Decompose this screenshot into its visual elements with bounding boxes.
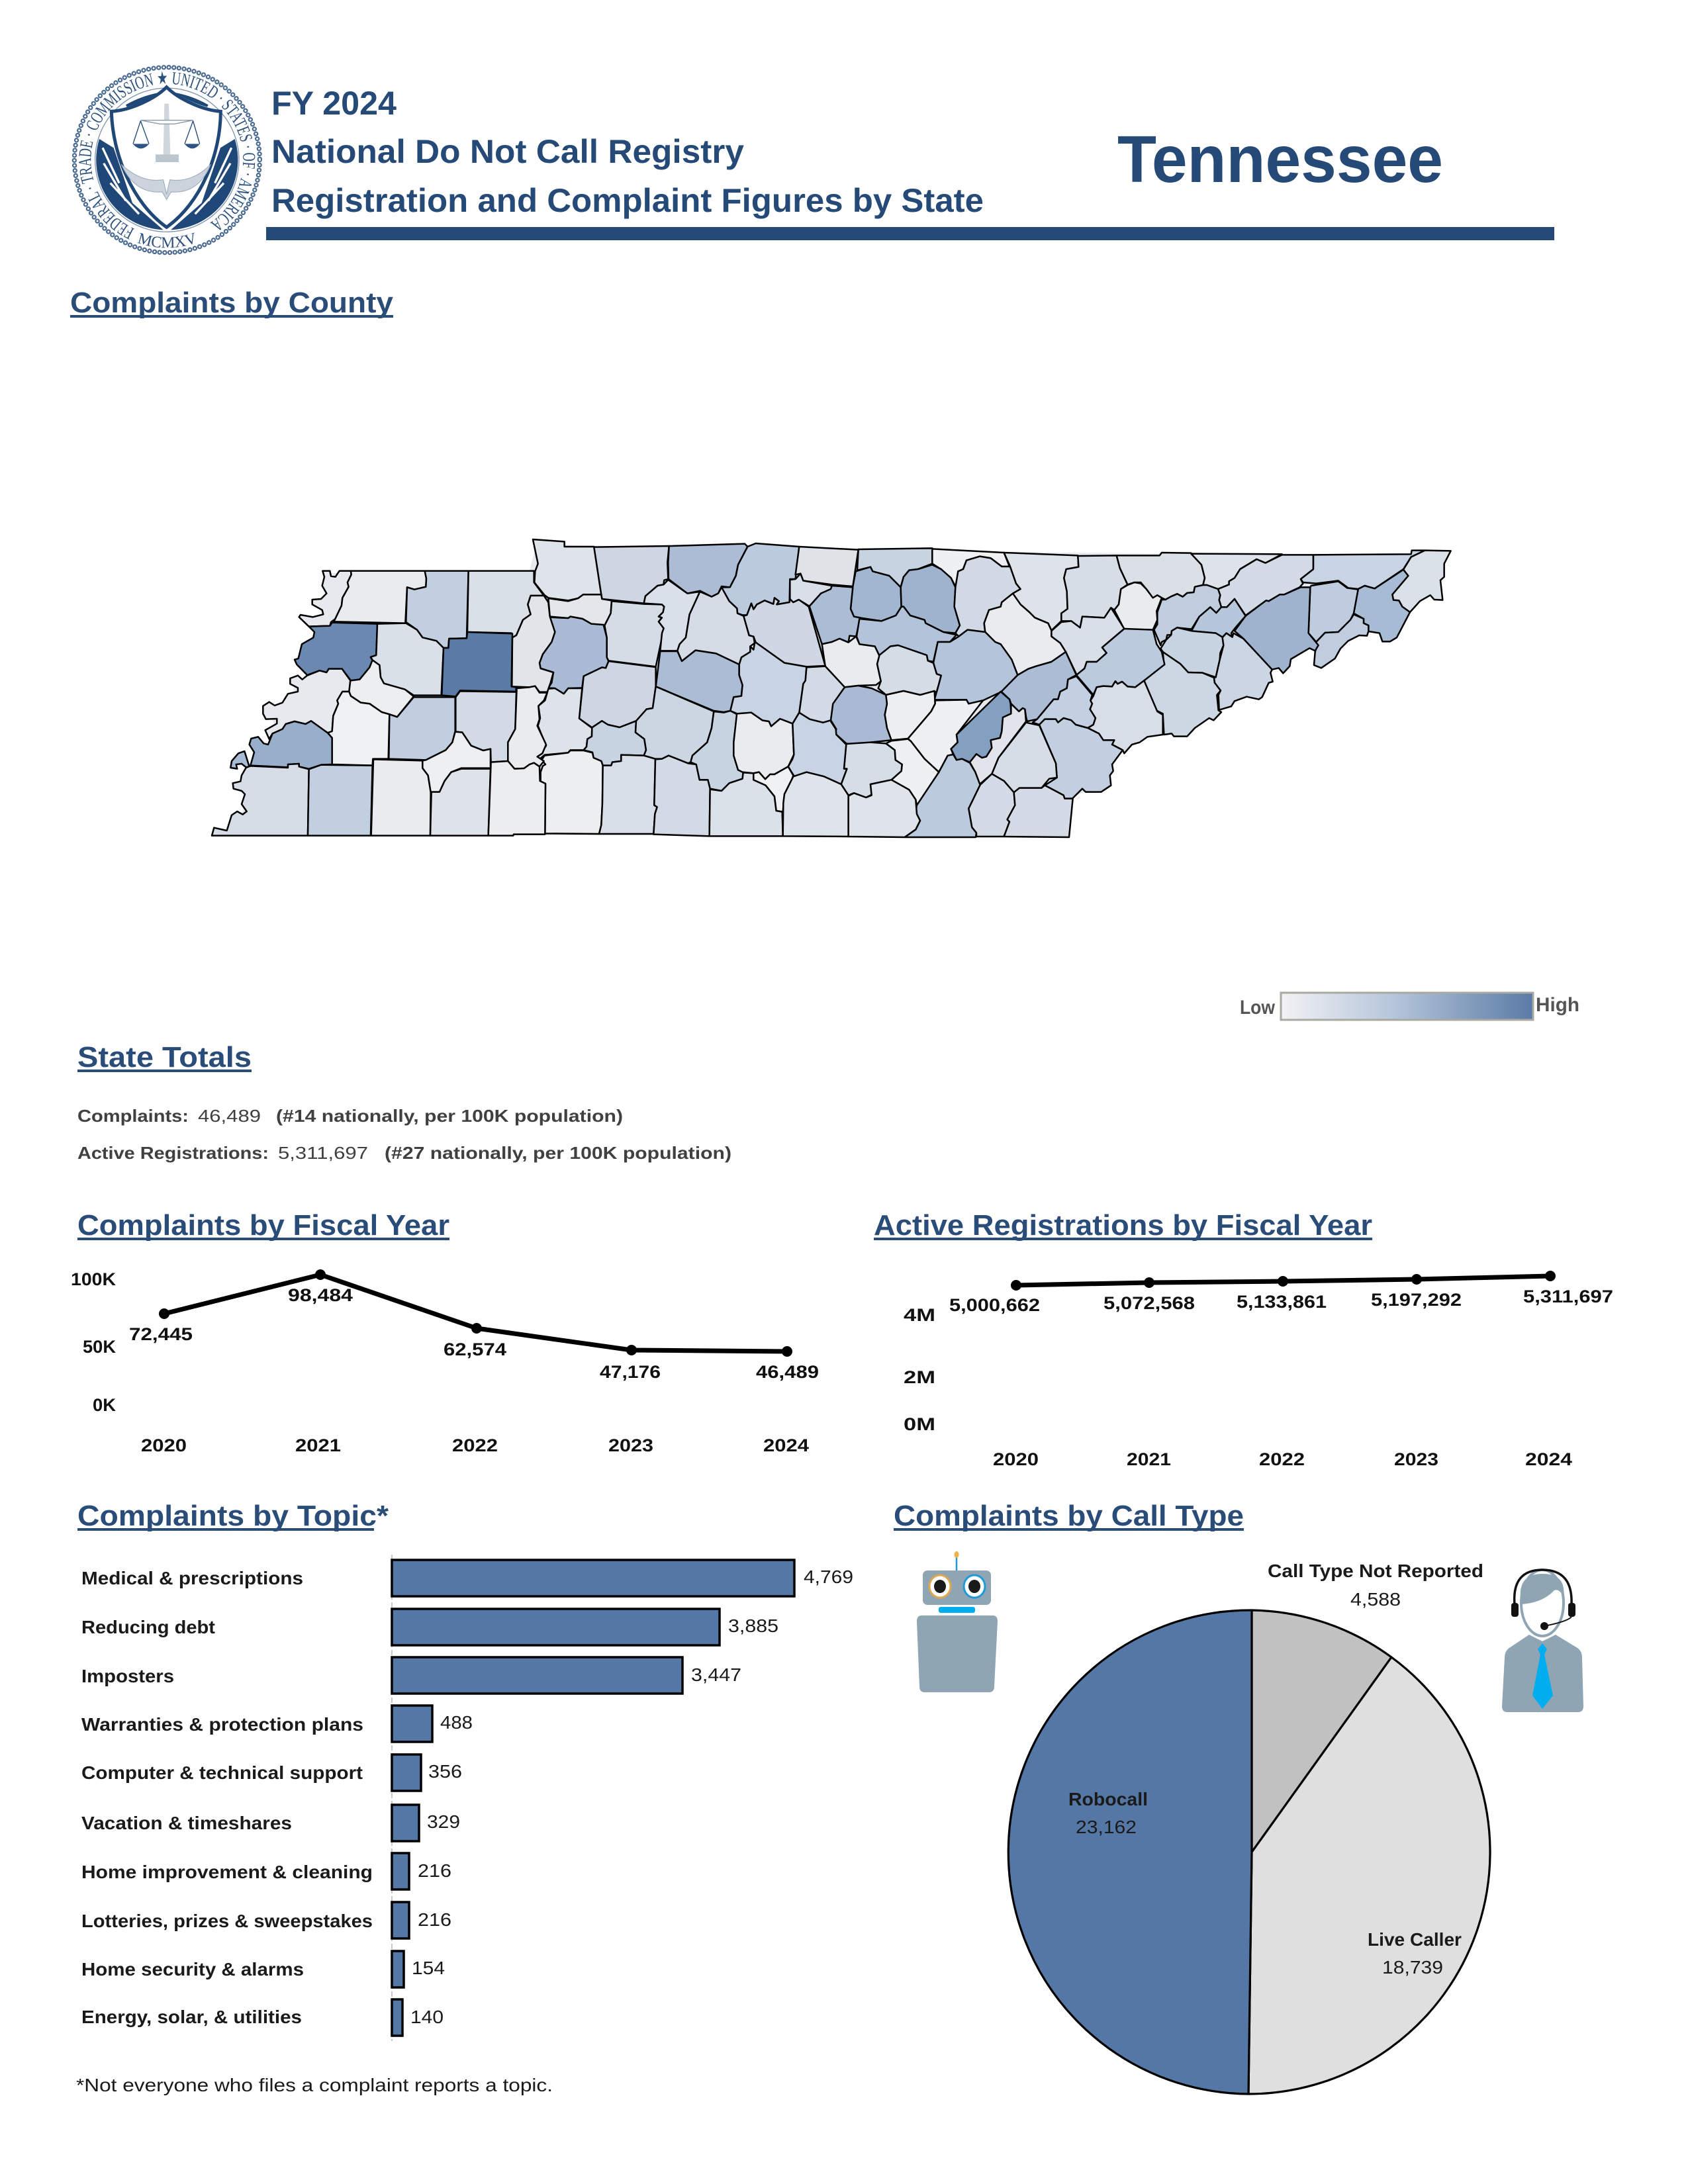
text block: state totals: (#27 nationally, per 100K population) xyxy=(385,1143,731,1163)
line chart: complaints by fiscal year xyxy=(71,1269,819,1455)
bar chart: complaints by topic: Computer & technical support xyxy=(81,1762,363,1783)
line chart: active registrations by fiscal year: 2021 xyxy=(1127,1449,1171,1469)
bar chart: complaints by topic: Reducing debt xyxy=(81,1617,215,1637)
text block: state totals: Active Registrations: xyxy=(77,1143,269,1163)
line chart: complaints by fiscal year: 62,574 xyxy=(444,1340,506,1359)
heading: state totals: State Totals xyxy=(77,1041,252,1073)
line chart: active registrations by fiscal year: 2020 xyxy=(993,1449,1039,1469)
title: report heading xyxy=(271,85,984,219)
bar chart: complaints by topic: 140 xyxy=(410,2007,444,2027)
line chart: active registrations by fiscal year: 4M xyxy=(904,1305,935,1325)
line chart: complaints by fiscal year: 2024 xyxy=(763,1435,809,1455)
title: state name: Tennessee xyxy=(1117,122,1443,197)
header rule xyxy=(266,227,1554,240)
pie labels: Live Caller xyxy=(1368,1929,1462,1950)
bar chart: complaints by topic: 216 xyxy=(418,1909,451,1930)
line chart: complaints by fiscal year: 50K xyxy=(83,1337,117,1357)
bar chart: complaints by topic: 3,447 xyxy=(691,1664,741,1685)
bar chart: complaints by topic: 154 xyxy=(412,1958,445,1978)
bar chart: complaints by topic: 329 xyxy=(427,1811,460,1832)
line chart: complaints by fiscal year: 2022 xyxy=(452,1435,498,1455)
line chart: active registrations by fiscal year: 5,311,697 xyxy=(1523,1287,1613,1306)
legend: low to high scale: Low xyxy=(1240,997,1276,1019)
icon: robot xyxy=(917,1551,998,1692)
pie chart: complaints by call type xyxy=(1008,1610,1490,2094)
logo: FTC seal: FEDERAL · TRADE · COMMISSION ★ UNITED · STATES · OF · AMERICA xyxy=(79,71,256,240)
legend: low to high scale: High xyxy=(1536,994,1579,1016)
heading: complaints by county: Complaints by County xyxy=(70,287,394,319)
line chart: complaints by fiscal year: 98,484 xyxy=(288,1285,353,1305)
legend: low to high scale xyxy=(1240,993,1579,1020)
heading: complaints by call type: Complaints by Call Type xyxy=(894,1500,1244,1532)
line chart: active registrations by fiscal year: 2M xyxy=(904,1367,935,1387)
title: report heading: FY 2024 xyxy=(271,85,397,122)
line chart: active registrations by fiscal year: 5,197,292 xyxy=(1371,1290,1462,1310)
icon: call center agent xyxy=(1502,1570,1583,1712)
line chart: complaints by fiscal year: 46,489 xyxy=(756,1362,819,1382)
line chart: active registrations by fiscal year: 5,133,861 xyxy=(1237,1292,1327,1312)
heading: complaints by topic: Complaints by Topic* xyxy=(77,1500,389,1532)
bar chart: complaints by topic: 216 xyxy=(418,1860,451,1881)
pie labels: Robocall xyxy=(1068,1789,1148,1809)
bar chart: complaints by topic: Vacation & timeshares xyxy=(81,1813,292,1833)
pie labels xyxy=(1068,1561,1483,1978)
line chart: active registrations by fiscal year: 0M xyxy=(904,1414,935,1434)
line chart: complaints by fiscal year: 100K xyxy=(71,1269,117,1289)
line chart: active registrations by fiscal year: 5,000,662 xyxy=(949,1295,1040,1315)
pie labels: 18,739 xyxy=(1382,1957,1443,1978)
text block: state totals: 46,489 xyxy=(198,1106,261,1126)
logo: FTC seal: ★ MCMXV ★ xyxy=(137,233,195,248)
heading: active registrations by fiscal year: Active Registrations by Fiscal Year xyxy=(874,1209,1372,1242)
line chart: active registrations by fiscal year: 2024 xyxy=(1525,1449,1572,1469)
line chart: complaints by fiscal year: 2020 xyxy=(141,1435,187,1455)
line chart: complaints by fiscal year: 2021 xyxy=(295,1435,341,1455)
text block: state totals: 5,311,697 xyxy=(278,1143,368,1163)
pie labels: 23,162 xyxy=(1076,1817,1137,1837)
line chart: complaints by fiscal year: 72,445 xyxy=(129,1324,193,1344)
bar chart: complaints by topic: Imposters xyxy=(81,1666,174,1686)
line chart: complaints by fiscal year: 2023 xyxy=(608,1435,653,1455)
bar chart: complaints by topic: 356 xyxy=(428,1761,462,1782)
pie labels: 4,588 xyxy=(1350,1589,1401,1610)
bar chart: complaints by topic: Medical & prescriptions xyxy=(81,1568,303,1588)
footnote: *Not everyone who files a complaint reports a topic. xyxy=(76,2075,553,2095)
heading: complaints by fiscal year: Complaints by Fiscal Year xyxy=(77,1209,449,1242)
title: report heading: Registration and Complaint Figures by State xyxy=(271,182,984,219)
bar chart: complaints by topic: Warranties & protection plans xyxy=(81,1714,363,1735)
bar chart: complaints by topic: Energy, solar, & utilities xyxy=(81,2007,302,2027)
bar chart: complaints by topic: 488 xyxy=(440,1712,473,1733)
map: Tennessee county choropleth xyxy=(212,539,1451,837)
bar chart: complaints by topic: 4,769 xyxy=(804,1567,853,1587)
bar chart: complaints by topic: Home improvement & cleaning xyxy=(81,1862,373,1882)
bar chart: complaints by topic: Home security & alarms xyxy=(81,1959,304,1979)
pie labels: Call Type Not Reported xyxy=(1268,1561,1483,1581)
bar chart: complaints by topic: Lotteries, prizes & sweepstakes xyxy=(81,1911,373,1931)
line chart: complaints by fiscal year: 0K xyxy=(93,1395,117,1415)
text block: state totals xyxy=(77,1106,731,1163)
bar chart: complaints by topic: 3,885 xyxy=(728,1615,778,1636)
line chart: active registrations by fiscal year: 2023 xyxy=(1394,1449,1438,1469)
line chart: active registrations by fiscal year xyxy=(904,1271,1613,1469)
line chart: active registrations by fiscal year: 5,072,568 xyxy=(1103,1293,1195,1313)
text block: state totals: Complaints: xyxy=(77,1106,189,1126)
bar chart: complaints by topic xyxy=(81,1555,853,2041)
text block: state totals: (#14 nationally, per 100K population) xyxy=(276,1106,623,1126)
title: report heading: National Do Not Call Registry xyxy=(271,133,744,170)
line chart: complaints by fiscal year: 47,176 xyxy=(600,1362,661,1382)
line chart: active registrations by fiscal year: 2022 xyxy=(1259,1449,1305,1469)
